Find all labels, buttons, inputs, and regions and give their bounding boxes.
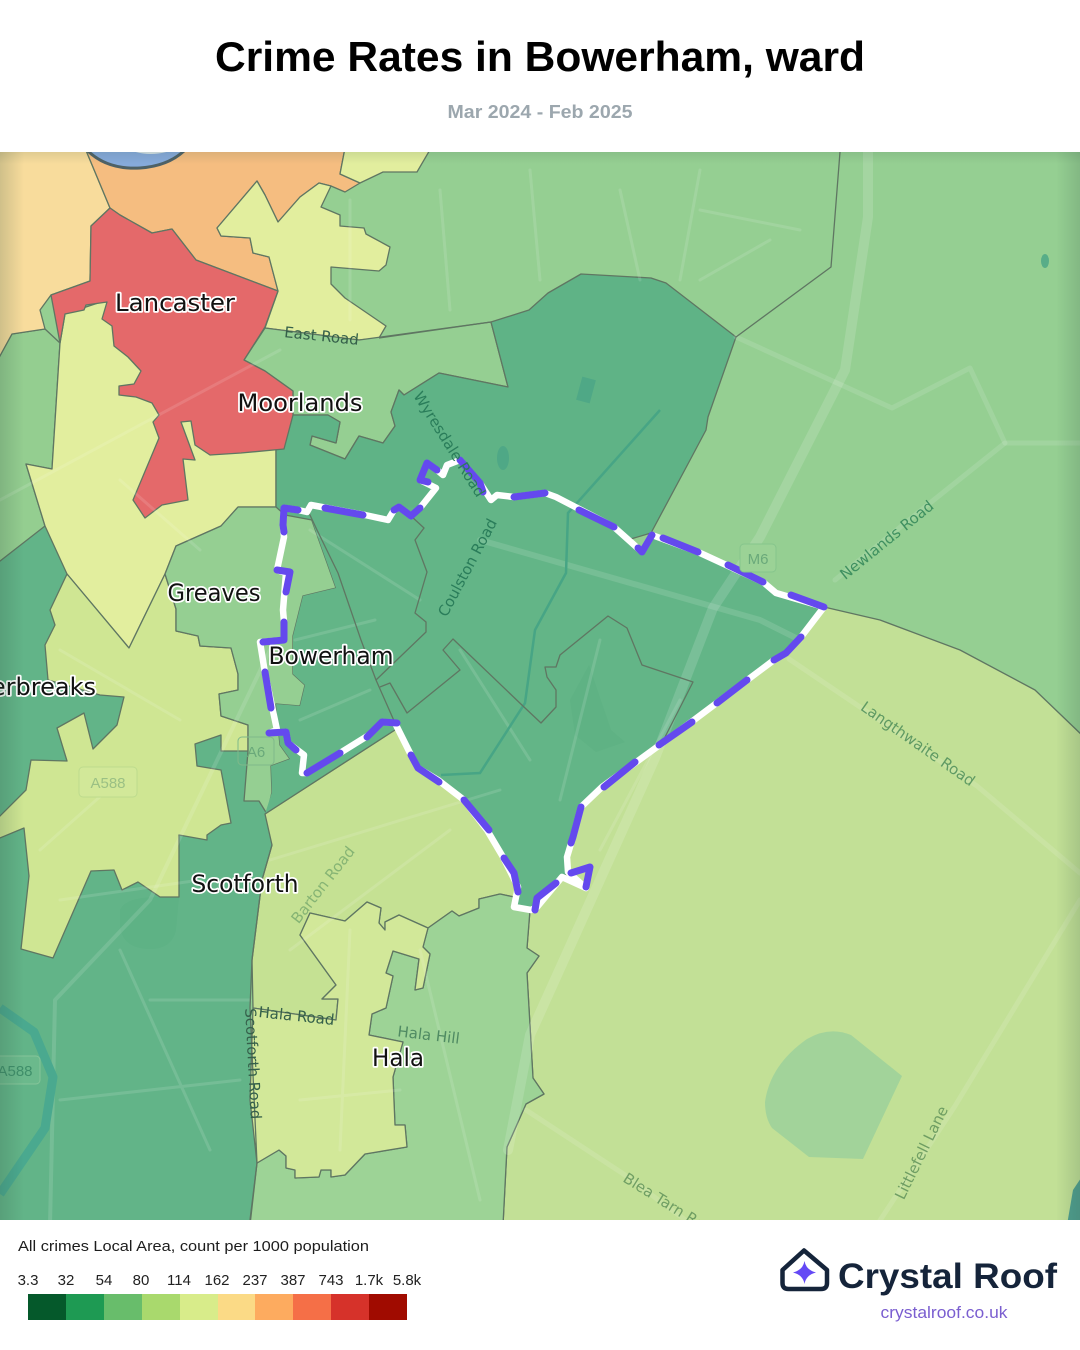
road shield: A6	[238, 737, 274, 765]
region: south-east light green	[503, 607, 1080, 1225]
road labels: Wyresdale Road	[410, 388, 489, 500]
road shield: M6	[740, 544, 776, 572]
place labels: Lancaster	[115, 289, 235, 317]
patch: Scotforth dark woodland	[120, 897, 179, 949]
legend scale labels: 237	[242, 1272, 268, 1289]
region: Bowerham ward fill	[266, 520, 818, 906]
water: top estuary	[87, 152, 185, 170]
legend scale labels: 5.8k	[393, 1272, 422, 1289]
legend scale labels: 80	[133, 1272, 149, 1289]
legend title: All crimes Local Area, count per 1000 population	[18, 1238, 369, 1255]
region: west strip	[0, 329, 60, 565]
legend scale labels: 387	[280, 1272, 306, 1289]
brand url: crystalroof.co.uk	[880, 1304, 1008, 1322]
road labels: Hala Hill	[397, 1022, 461, 1048]
road labels: Langthwaite Road	[857, 698, 978, 790]
ward outline: white base	[260, 460, 824, 910]
region: city orange	[85, 148, 360, 291]
pond: north-east	[1041, 254, 1049, 268]
road labels: Scotforth Road	[241, 1008, 265, 1120]
brand name: Crystal Roof	[838, 1257, 1057, 1296]
place labels: Greaves	[168, 579, 260, 607]
region: west large light yellow	[26, 300, 276, 648]
road labels: Newlands Road	[836, 497, 937, 583]
legend scale labels: 743	[318, 1272, 344, 1289]
region: racecourse patch	[765, 1031, 902, 1159]
road labels: Barton Road	[287, 843, 359, 927]
road labels: East Road	[283, 323, 360, 349]
place labels: Scotforth	[192, 870, 298, 898]
region: north dark green	[276, 274, 736, 560]
pond: wood pond	[497, 446, 509, 470]
legend scale labels: 32	[58, 1272, 74, 1289]
region: Greaves green	[165, 507, 336, 814]
place labels: Moorlands	[238, 389, 362, 417]
road labels: Hala Road	[258, 1003, 335, 1029]
decorative roads	[0, 152, 1080, 1225]
road shield: A588: A588	[90, 775, 126, 792]
pond: northern pond	[576, 377, 596, 403]
legend scale labels	[18, 1272, 422, 1289]
road labels: Littlefell Lane	[891, 1103, 952, 1202]
subtitle: date range: Mar 2024 - Feb 2025	[448, 102, 632, 122]
ward outline: purple dashes	[263, 460, 824, 910]
road labels: Coulston Road	[434, 516, 501, 620]
water: top highlight	[136, 152, 166, 154]
LSOA boundaries	[250, 152, 840, 1220]
road labels	[241, 323, 978, 1243]
patch: ward dark woodland	[570, 665, 625, 752]
place labels: Bowerham	[268, 642, 394, 670]
river south-west	[0, 1008, 53, 1194]
legend scale labels: 3.3	[18, 1272, 38, 1289]
region: Hala pale yellow-green	[250, 902, 430, 1178]
region: centre-south light green	[252, 728, 518, 1020]
region: East Road light green	[244, 322, 508, 459]
legend scale labels: 162	[204, 1272, 230, 1289]
legend scale labels: 1.7k	[355, 1272, 384, 1289]
legend colour bar	[28, 1294, 407, 1320]
region: Lancaster red	[51, 208, 293, 518]
region: top strip light yellow	[340, 148, 431, 183]
title: Crime Rates in Bowerham, ward	[215, 33, 865, 80]
region: north-centre light yellow	[217, 181, 390, 340]
road shield: A6: A6	[247, 744, 265, 761]
legend scale labels: 114	[167, 1272, 191, 1289]
road shield: M6: M6	[748, 551, 768, 568]
place labels: Hala	[372, 1044, 424, 1072]
place labels	[0, 289, 424, 1072]
road labels: Blea Tarn Road	[620, 1169, 724, 1243]
region: west yellow-green	[0, 574, 248, 958]
map edge shading	[0, 152, 1080, 1220]
road shield: A588 south-west	[0, 1056, 40, 1084]
water: south-east corner	[1068, 1180, 1080, 1220]
region: south-west dark green area	[0, 527, 272, 1220]
region: north-west yellow	[0, 148, 110, 365]
legend scale labels: 54	[96, 1272, 112, 1289]
icon: Crystal Roof house logo	[782, 1250, 827, 1289]
region: Hala green	[250, 894, 544, 1225]
river in ward	[441, 410, 660, 775]
road shield: A588	[79, 767, 137, 797]
